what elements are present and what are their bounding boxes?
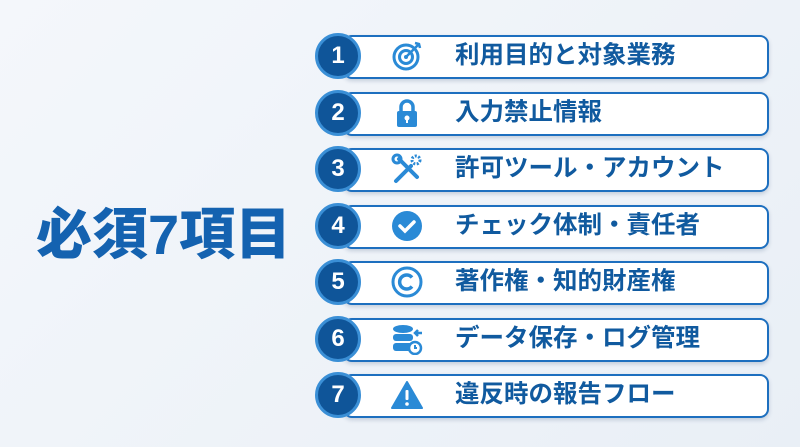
item 6: 6 [331, 325, 345, 352]
item 5: 5 [331, 268, 345, 295]
item 4 [315, 203, 771, 253]
item 1: 1 [331, 42, 345, 69]
item 4: チェック体制・責任者 [455, 212, 700, 239]
item 3: 許可ツール・アカウント [455, 155, 724, 182]
icon: lock [397, 99, 417, 127]
icon: target [392, 42, 422, 70]
item 5: 著作権・知的財産権 [455, 268, 676, 295]
item 6 [315, 316, 771, 366]
item 5 [315, 259, 771, 309]
icon: warning [391, 381, 423, 409]
item 4: 4 [331, 212, 345, 239]
icon: tools [392, 154, 422, 184]
item 3 [315, 146, 771, 196]
item 1 [315, 33, 771, 83]
item 3: 3 [331, 155, 345, 182]
item 6: データ保存・ログ管理 [455, 325, 700, 352]
item 2: 入力禁止情報 [455, 99, 602, 126]
icon: database [393, 325, 422, 355]
item 1: 利用目的と対象業務 [455, 42, 676, 69]
item 7: 違反時の報告フロー [455, 381, 676, 408]
item 7: 7 [331, 381, 345, 408]
item 2: 2 [331, 99, 345, 126]
item 7 [315, 372, 771, 422]
title: 必須7項目 [36, 203, 291, 266]
icon: check [392, 211, 422, 241]
icon: copyright [392, 266, 422, 298]
item 2 [315, 90, 771, 140]
